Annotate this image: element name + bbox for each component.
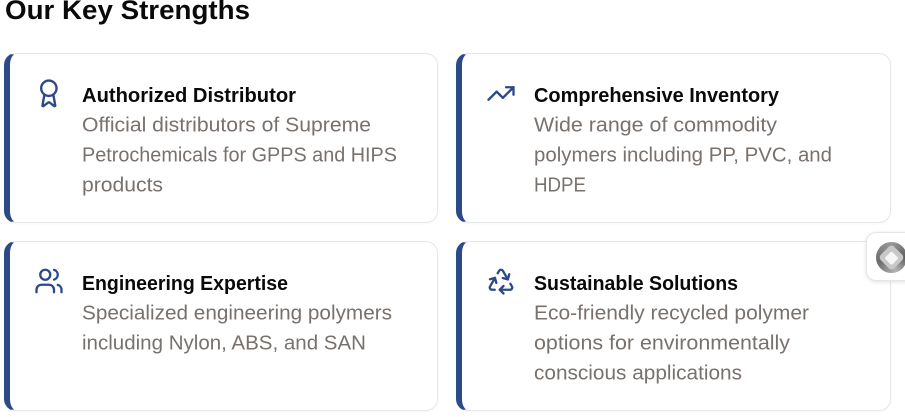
panel: Engineering Expertise (4, 241, 438, 411)
floating widget button (866, 232, 905, 281)
description: Sustainable Solutions: Eco-friendly recycled polymer (534, 302, 809, 324)
description: Authorized Distributor: Petrochemicals for GPPS and HIPS (82, 144, 397, 166)
description: Sustainable Solutions: conscious applications (534, 362, 742, 384)
description: Authorized Distributor: Official distributors of Supreme (82, 114, 371, 136)
heading: Sustainable Solutions: Sustainable Solutions (534, 273, 738, 295)
icon: recycle (490, 270, 512, 294)
heading: Engineering Expertise: Engineering Expertise (82, 273, 288, 295)
description: Engineering Expertise (82, 302, 392, 354)
panel: Sustainable Solutions (456, 241, 891, 411)
icon: widget logo (876, 242, 905, 273)
description: Comprehensive Inventory: polymers including PP, PVC, and (534, 144, 832, 166)
heading: Comprehensive Inventory: Comprehensive Inventory (534, 85, 780, 107)
description: Comprehensive Inventory: Wide range of commodity (534, 114, 777, 136)
description: Authorized Distributor: products (82, 174, 163, 196)
panel: Comprehensive Inventory (456, 53, 891, 223)
description: Sustainable Solutions (534, 302, 809, 384)
description: Engineering Expertise: Specialized engineering polymers (82, 302, 392, 324)
icon: users (36, 270, 62, 292)
panel: Authorized Distributor (4, 53, 438, 223)
icon: award ribbon (41, 81, 57, 106)
description: Authorized Distributor (82, 114, 397, 196)
description: Engineering Expertise: including Nylon, ABS, and SAN (82, 332, 366, 354)
heading: Authorized Distributor: Authorized Distributor (82, 85, 296, 107)
description: Sustainable Solutions: options for environmentally (534, 332, 790, 354)
description: Comprehensive Inventory (534, 114, 832, 196)
description: Comprehensive Inventory: HDPE (534, 174, 586, 196)
icon: trending up (488, 87, 514, 100)
